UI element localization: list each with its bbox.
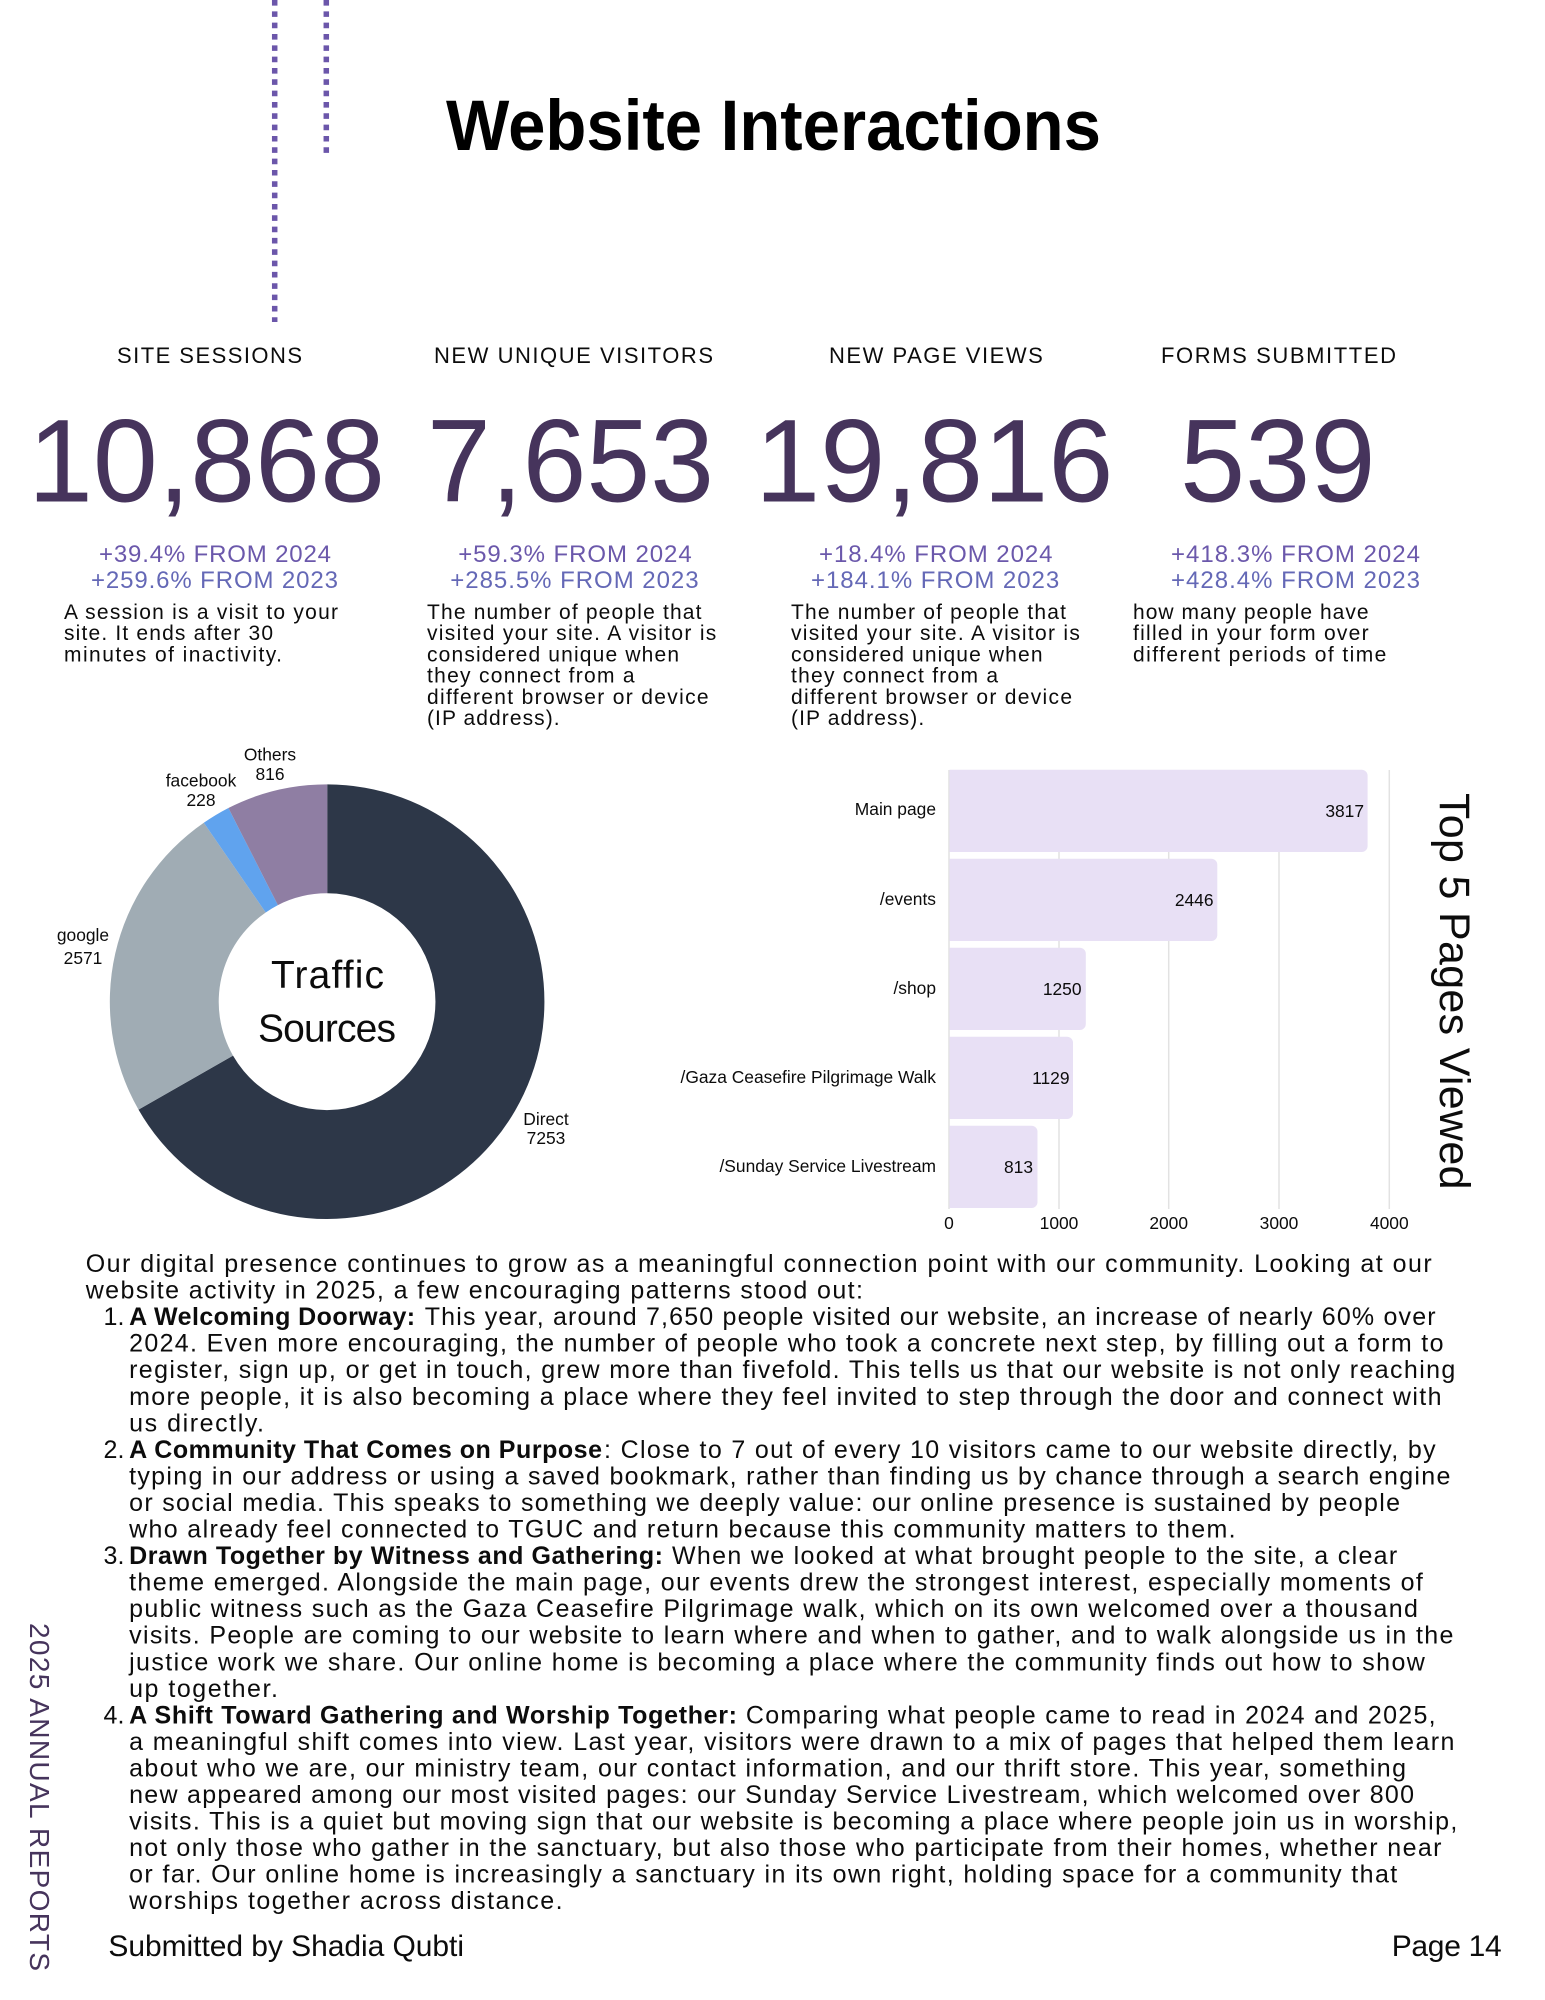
- list item 2: or social media. This speaks to something we deeply value: our online presence is sustained by people: [129, 1489, 1400, 1517]
- list item 4: new appeared among our most visited pages: our Sunday Service Livestream, which welcomed over 800: [129, 1781, 1414, 1809]
- bar categories: Main page: [855, 799, 936, 819]
- list item 4: visits. This is a quiet but moving sign that our website is becoming a place where people join us in worship,: [129, 1808, 1457, 1836]
- list item 1: more people, it is also becoming a place where they feel invited to step through the door and connect with: [129, 1383, 1442, 1411]
- list item 4: not only those who gather in the sanctuary, but also those who participate from their homes, whether near: [129, 1834, 1442, 1862]
- list item 1: 1.: [104, 1303, 124, 1331]
- list item 1: This year, around 7,650 people visited our website, an increase of nearly 60% over: [425, 1303, 1436, 1331]
- footer: page number: Page 14: [1392, 1930, 1502, 1963]
- stat label: SITE SESSIONS: [117, 343, 302, 368]
- list item 4: about who we are, our ministry team, our contact information, and our thrift store. This year, something: [129, 1754, 1406, 1782]
- x axis labels: 1000: [1040, 1213, 1078, 1233]
- change from prior years: +59.3% FROM 2024: [458, 541, 692, 568]
- intro paragraph: [85, 1250, 1432, 1305]
- list item 3: 3.: [104, 1542, 124, 1570]
- change from prior years: +259.6% FROM 2023: [91, 567, 338, 594]
- footer: submitted by: Submitted by Shadia Qubti: [108, 1930, 464, 1963]
- decorative dotted line: short: [324, 0, 329, 155]
- list item 4: worships together across distance.: [128, 1887, 563, 1915]
- donut chart: traffic sources: [57, 744, 569, 1219]
- list item 2: A Community That Comes on Purpose: [129, 1436, 602, 1464]
- panel: forms submitted: [1133, 343, 1420, 666]
- donut labels: [57, 744, 569, 1148]
- list item 2: [104, 1436, 1450, 1544]
- body text: [85, 1250, 1457, 1915]
- stat number: 19,816: [755, 396, 1114, 528]
- list item 1: us directly.: [129, 1409, 264, 1437]
- description: (IP address).: [427, 707, 560, 730]
- description: A session is a visit to your: [64, 601, 338, 624]
- slice: others: [228, 784, 327, 905]
- list item 1: register, sign up, or get in touch, grew more than fivefold. This tells us that our website is not only reaching: [129, 1356, 1455, 1384]
- intro paragraph: Our digital presence continues to grow as a meaningful connection point with our community. Looking at our: [86, 1250, 1432, 1278]
- list item 3: [104, 1542, 1453, 1703]
- stat label: NEW PAGE VIEWS: [829, 343, 1043, 368]
- slice: google: [110, 823, 266, 1110]
- list item 2: 2.: [104, 1436, 124, 1464]
- panel: new page views: [755, 343, 1114, 730]
- description: (IP address).: [791, 707, 924, 730]
- list item 3: justice work we share. Our online home is becoming a place where the community finds out how to show: [128, 1648, 1426, 1676]
- stat number: 7,653: [427, 396, 714, 528]
- description: different browser or device: [791, 686, 1072, 709]
- panel: site sessions: [28, 343, 385, 666]
- chart title: top 5 pages viewed: Top 5 Pages Viewed: [1430, 793, 1478, 1190]
- change from prior years: +285.5% FROM 2023: [450, 567, 699, 594]
- change from prior years: +418.3% FROM 2024: [1171, 541, 1420, 568]
- bar values: [1004, 801, 1364, 1177]
- description: visited your site. A visitor is: [791, 622, 1080, 645]
- stat number: 10,868: [28, 396, 385, 528]
- list item 4: A Shift Toward Gathering and Worship Together:: [129, 1701, 737, 1729]
- bar values: 2446: [1175, 890, 1214, 910]
- description: different periods of time: [1133, 643, 1386, 666]
- description: site. It ends after 30: [64, 622, 273, 645]
- donut labels: facebook: [166, 770, 237, 790]
- list item 2: who already feel connected to TGUC and return because this community matters to them.: [128, 1516, 1236, 1544]
- bar categories: [681, 799, 936, 1176]
- description: considered unique when: [791, 643, 1042, 666]
- description: they connect from a: [791, 665, 998, 688]
- list item 3: visits. People are coming to our website to learn where and when to gather, and to walk alongside us in the: [129, 1622, 1453, 1650]
- description: filled in your form over: [1133, 622, 1369, 645]
- bar categories: /Sunday Service Livestream: [719, 1156, 936, 1176]
- decorative dotted line: long: [272, 0, 277, 322]
- change from prior years: [450, 541, 699, 594]
- slice: facebook: [204, 808, 278, 912]
- donut labels: 816: [255, 764, 285, 784]
- x axis labels: 2000: [1149, 1213, 1188, 1233]
- change from prior years: +184.1% FROM 2023: [811, 567, 1059, 594]
- description: how many people have: [1133, 601, 1369, 624]
- x axis labels: 0: [944, 1213, 954, 1233]
- x axis labels: [944, 1213, 1409, 1233]
- x axis labels: 3000: [1260, 1213, 1298, 1233]
- list item 2: : Close to 7 out of every 10 visitors came to our website directly, by: [604, 1436, 1436, 1464]
- donut centre title: [258, 954, 396, 1051]
- list item 4: or far. Our online home is increasingly a sanctuary in its own right, holding space for a community that: [129, 1861, 1397, 1889]
- description: [427, 601, 716, 730]
- description: [791, 601, 1080, 730]
- description: different browser or device: [427, 686, 709, 709]
- list item 4: 4.: [104, 1701, 124, 1729]
- bar values: 813: [1004, 1157, 1033, 1177]
- change from prior years: +428.4% FROM 2023: [1171, 567, 1420, 594]
- bar values: 1129: [1032, 1068, 1070, 1088]
- description: they connect from a: [427, 665, 635, 688]
- description: [1133, 601, 1386, 666]
- donut labels: 228: [186, 790, 216, 810]
- sidebar: annual reports label: 2025 ANNUAL REPORTS: [24, 1623, 55, 1971]
- bars: [950, 770, 1368, 1208]
- donut centre title: Sources: [258, 1008, 396, 1051]
- stat label: NEW UNIQUE VISITORS: [434, 343, 713, 368]
- list item 4: a meaningful shift comes into view. Last year, visitors were drawn to a mix of pages that helped them learn: [129, 1728, 1454, 1756]
- donut labels: Direct: [523, 1109, 569, 1129]
- donut labels: google: [57, 925, 109, 945]
- list item 3: When we looked at what brought people to the site, a clear: [672, 1542, 1397, 1570]
- list item 4: Comparing what people came to read in 2024 and 2025,: [746, 1701, 1436, 1729]
- list item 1: [104, 1303, 1455, 1437]
- stat label: FORMS SUBMITTED: [1161, 343, 1396, 368]
- title: Website Interactions: [446, 87, 1101, 166]
- description: The number of people that: [427, 601, 702, 624]
- donut labels: 7253: [527, 1128, 565, 1148]
- bar categories: /events: [880, 889, 936, 909]
- description: The number of people that: [791, 601, 1066, 624]
- change from prior years: +39.4% FROM 2024: [99, 541, 331, 568]
- donut labels: Others: [244, 744, 296, 764]
- bar categories: /shop: [893, 978, 936, 998]
- change from prior years: +18.4% FROM 2024: [819, 541, 1052, 568]
- bar categories: /Gaza Ceasefire Pilgrimage Walk: [681, 1067, 936, 1087]
- list item 4: [104, 1701, 1457, 1915]
- list item 3: public witness such as the Gaza Ceasefire Pilgrimage walk, which on its own welcomed over a thousand: [129, 1595, 1418, 1623]
- list item 3: up together.: [129, 1675, 278, 1703]
- stat number: 539: [1180, 396, 1376, 528]
- list item 3: theme emerged. Alongside the main page, our events drew the strongest interest, especially moments of: [129, 1569, 1423, 1597]
- change from prior years: [1171, 541, 1420, 594]
- list item 1: 2024. Even more encouraging, the number of people who took a concrete next step, by filling out a form to: [129, 1330, 1444, 1358]
- description: considered unique when: [427, 643, 679, 666]
- donut labels: 2571: [64, 948, 102, 968]
- slice: direct: [138, 784, 544, 1219]
- description: visited your site. A visitor is: [427, 622, 716, 645]
- change from prior years: [811, 541, 1059, 594]
- change from prior years: [91, 541, 338, 594]
- bar values: 3817: [1325, 801, 1364, 821]
- description: [64, 601, 338, 666]
- bar values: 1250: [1043, 979, 1082, 999]
- donut centre title: Traffic: [271, 954, 384, 997]
- list item 3: Drawn Together by Witness and Gathering:: [129, 1542, 663, 1570]
- x axis labels: 4000: [1370, 1213, 1409, 1233]
- intro paragraph: website activity in 2025, a few encouraging patterns stood out:: [85, 1277, 863, 1305]
- description: minutes of inactivity.: [64, 643, 282, 666]
- bar chart: top 5 pages viewed: [681, 770, 1409, 1233]
- panel: new unique visitors: [427, 343, 716, 730]
- list item 1: A Welcoming Doorway:: [129, 1303, 415, 1331]
- list item 2: typing in our address or using a saved bookmark, rather than finding us by chance through a search engine: [129, 1462, 1450, 1490]
